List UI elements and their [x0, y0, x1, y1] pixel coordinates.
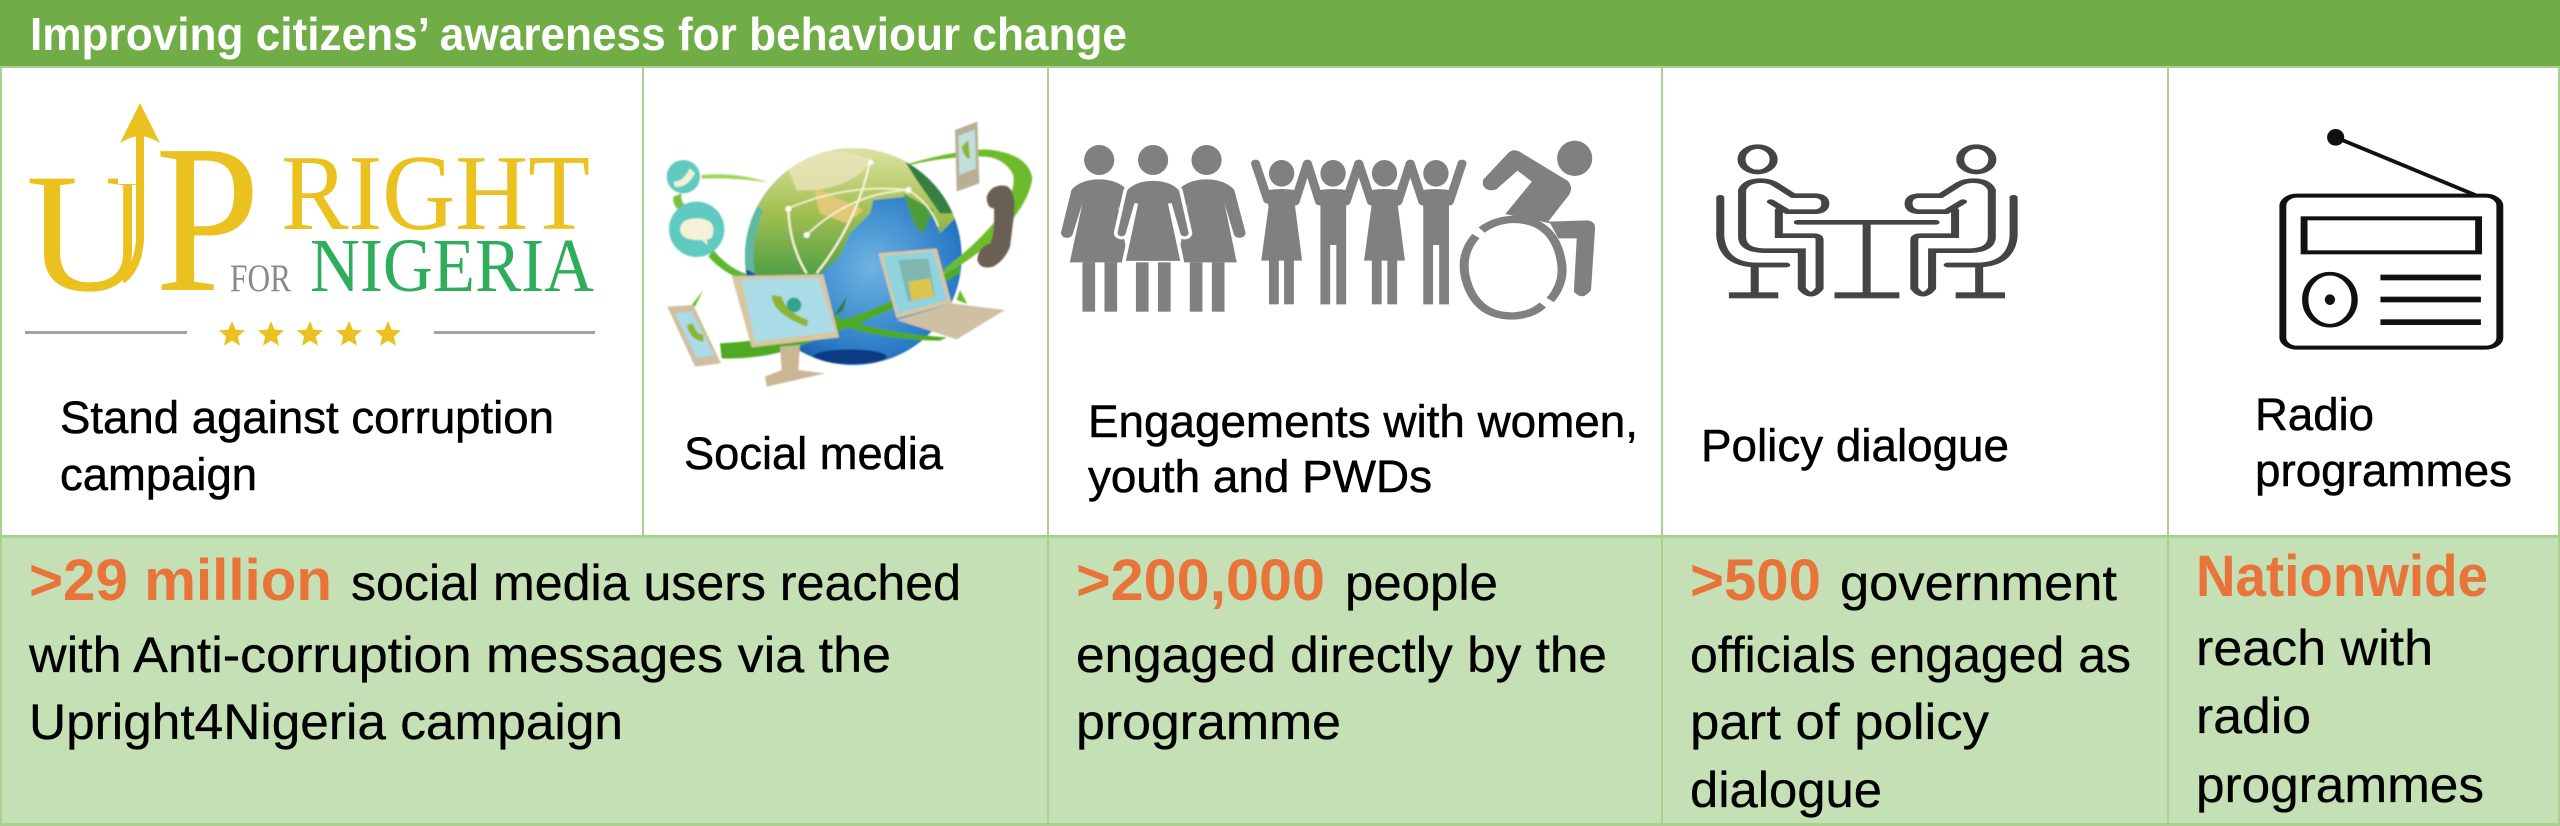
label: stand against corruption: campaign — [60, 449, 257, 500]
stat: 29 million social media users — [28, 548, 961, 750]
stat: nationwide radio reach: reach with — [2196, 620, 2433, 676]
icon: upright for nigeria logo: FOR — [230, 257, 291, 300]
stat: 200,000 people engaged: engaged directly by the — [1076, 627, 1607, 683]
stat: nationwide radio reach: radio — [2196, 688, 2311, 744]
stat: 200,000 people engaged — [1076, 548, 1607, 750]
icon: four young people with raised arms — [1256, 160, 1462, 304]
icon: left seated person — [1720, 147, 1825, 298]
panel: radio programmes — [2168, 67, 2559, 536]
icon: radio — [2283, 129, 2500, 348]
title: Improving citizens’ awareness for behaviour change — [30, 8, 1127, 60]
stat: 200,000 people engaged: people — [1345, 555, 1498, 611]
label: stand against corruption: Stand against corruption — [60, 392, 554, 443]
icon: upright for nigeria logo: U — [26, 139, 150, 327]
stat: 200,000 people engaged: >200,000 — [1076, 548, 1325, 613]
stat: nationwide radio reach: Nationwide — [2196, 544, 2488, 609]
icon: table — [1798, 222, 1936, 298]
label: engagements with women, youth and PWDs: Engagements with women, — [1088, 396, 1638, 447]
panel: upright for nigeria campaign — [1, 67, 643, 536]
label: radio programmes: Radio — [2255, 389, 2374, 440]
stat: 500 government officials — [1690, 548, 2131, 818]
icon: two people seated at a table — [1720, 147, 2014, 298]
stat: nationwide radio reach: programmes — [2196, 757, 2484, 813]
icon: three women — [1061, 145, 1246, 312]
stat: 500 government officials: >500 — [1690, 548, 1821, 613]
panel: social media — [644, 66, 1047, 470]
icon: upright for nigeria logo: NIGERIA — [310, 224, 594, 308]
stat: 29 million social media users: Upright4Nigeria campaign — [29, 694, 623, 750]
stat: nationwide radio reach — [2196, 544, 2488, 813]
stat: 29 million social media users: with Anti-corruption messages via the — [28, 627, 891, 683]
icon: women, youth and wheelchair user — [1061, 141, 1595, 316]
label: engagements with women, youth and PWDs: youth and PWDs — [1088, 451, 1432, 502]
label: social media: Social media — [684, 428, 944, 479]
stat: 29 million social media users: social media users reached — [351, 555, 961, 611]
label: policy dialogue: Policy dialogue — [1701, 420, 2009, 471]
icon: upright for nigeria logo: P — [155, 101, 260, 336]
stat: 500 government officials: part of policy — [1690, 694, 1989, 750]
icon: globe with devices — [667, 122, 1032, 387]
stat: 500 government officials: government — [1840, 555, 2117, 611]
icon: upright for nigeria logo — [25, 101, 595, 346]
stat: 500 government officials: dialogue — [1690, 762, 1882, 818]
stat: 200,000 people engaged: programme — [1076, 694, 1341, 750]
stats band background — [0, 535, 2560, 826]
icon: wheelchair user — [1464, 141, 1595, 316]
stat: 500 government officials: officials engaged as — [1690, 627, 2131, 683]
stat: 29 million social media users: >29 million — [29, 548, 332, 613]
label: radio programmes: programmes — [2255, 445, 2512, 496]
header bar — [0, 0, 2560, 67]
icon: upright for nigeria logo: RIGHT — [281, 134, 590, 253]
panel: engagements with women, youth and PWDs — [1048, 67, 1662, 536]
panel: policy dialogue — [1662, 67, 2168, 536]
icon: right seated person — [1909, 147, 2014, 298]
